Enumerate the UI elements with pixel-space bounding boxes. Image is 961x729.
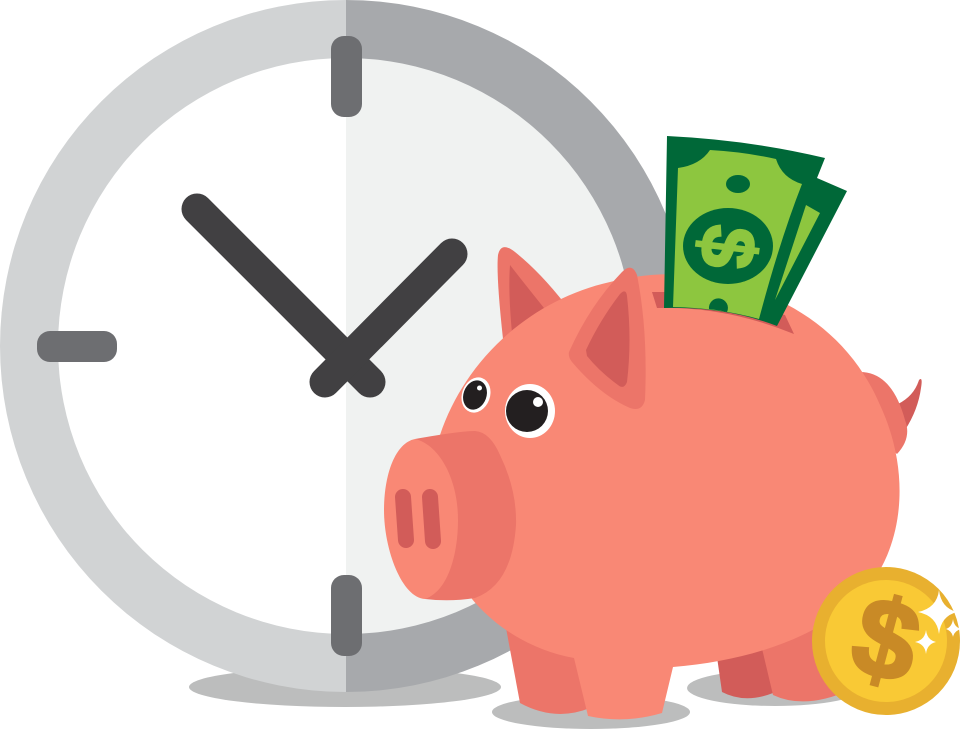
pig tail	[898, 379, 922, 430]
clock tick marks	[37, 36, 362, 656]
pig snout	[384, 431, 516, 600]
icon: banknotes	[664, 136, 847, 326]
pig rump	[860, 372, 907, 454]
icon: piggy bank	[384, 136, 922, 719]
pig body	[436, 274, 900, 719]
icon: clock	[0, 0, 692, 692]
far ear	[498, 247, 565, 339]
clock hands	[197, 209, 452, 382]
ground shadows	[189, 667, 863, 729]
icon: gold coin	[812, 567, 961, 715]
pig eyes	[457, 373, 555, 438]
dollar sign on front banknote: $	[683, 221, 772, 273]
near ear	[569, 268, 646, 409]
sparkles	[915, 590, 961, 654]
coin slot	[652, 292, 794, 334]
far legs	[716, 640, 773, 698]
dollar sign on coin: $	[840, 571, 932, 708]
nostrils	[403, 497, 433, 541]
